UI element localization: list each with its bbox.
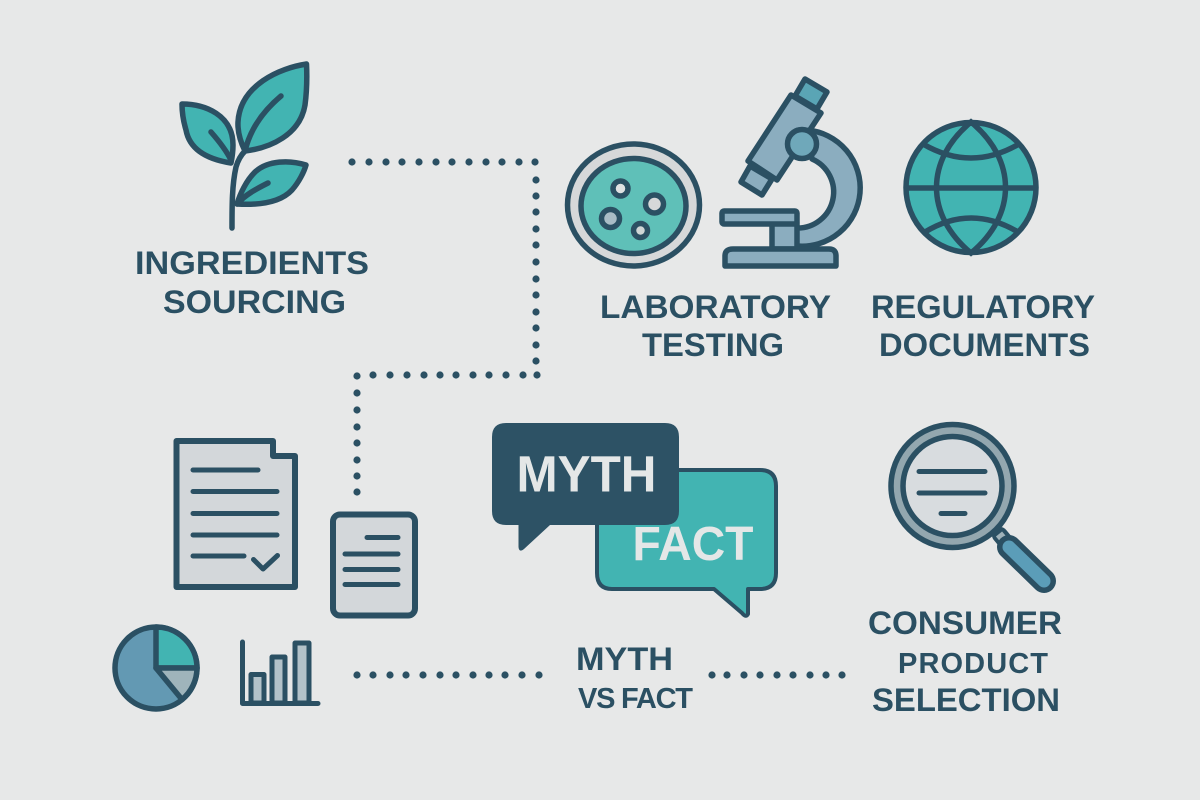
- label: laboratory testing: LABORATORY: [600, 289, 831, 325]
- label: regulatory documents: DOCUMENTS: [879, 327, 1090, 363]
- icon: microscope: [722, 79, 860, 266]
- connector: dotted line from charts to myth vs fact: [353, 671, 543, 679]
- bubble text: myth: MYTH: [516, 446, 656, 502]
- label: ingredients sourcing: [135, 245, 369, 320]
- connector: dotted line from ingredients to documents: [348, 158, 541, 496]
- icon: fact speech bubble: [597, 470, 776, 616]
- icon: small document: [333, 514, 415, 616]
- label: myth vs fact: [576, 641, 693, 715]
- bubble text: fact: FACT: [632, 518, 754, 571]
- label: ingredients sourcing: SOURCING: [163, 284, 346, 320]
- icon: pie chart: [115, 627, 197, 709]
- label: laboratory testing: [600, 289, 831, 363]
- icon: petri dish: [568, 144, 700, 266]
- label: consumer product selection: CONSUMER: [868, 605, 1062, 641]
- icon: myth speech bubble: [492, 423, 679, 551]
- icon: globe: [906, 122, 1036, 253]
- label: myth vs fact: MYTH: [576, 641, 673, 677]
- label: consumer product selection: PRODUCT: [898, 648, 1048, 680]
- connector: dotted line from myth vs fact to consumer: [708, 671, 846, 679]
- label: ingredients sourcing: INGREDIENTS: [135, 245, 369, 281]
- icon: large document with checkmark: [176, 441, 295, 587]
- label: laboratory testing: TESTING: [642, 327, 784, 363]
- label: myth vs fact: VS FACT: [578, 683, 693, 715]
- label: regulatory documents: [871, 289, 1095, 363]
- icon: magnifying glass: [891, 424, 1044, 581]
- icon: bar chart: [242, 642, 318, 704]
- label: consumer product selection: SELECTION: [872, 682, 1060, 718]
- label: consumer product selection: [868, 605, 1062, 718]
- label: regulatory documents: REGULATORY: [871, 289, 1095, 325]
- icon: plant: [182, 64, 307, 228]
